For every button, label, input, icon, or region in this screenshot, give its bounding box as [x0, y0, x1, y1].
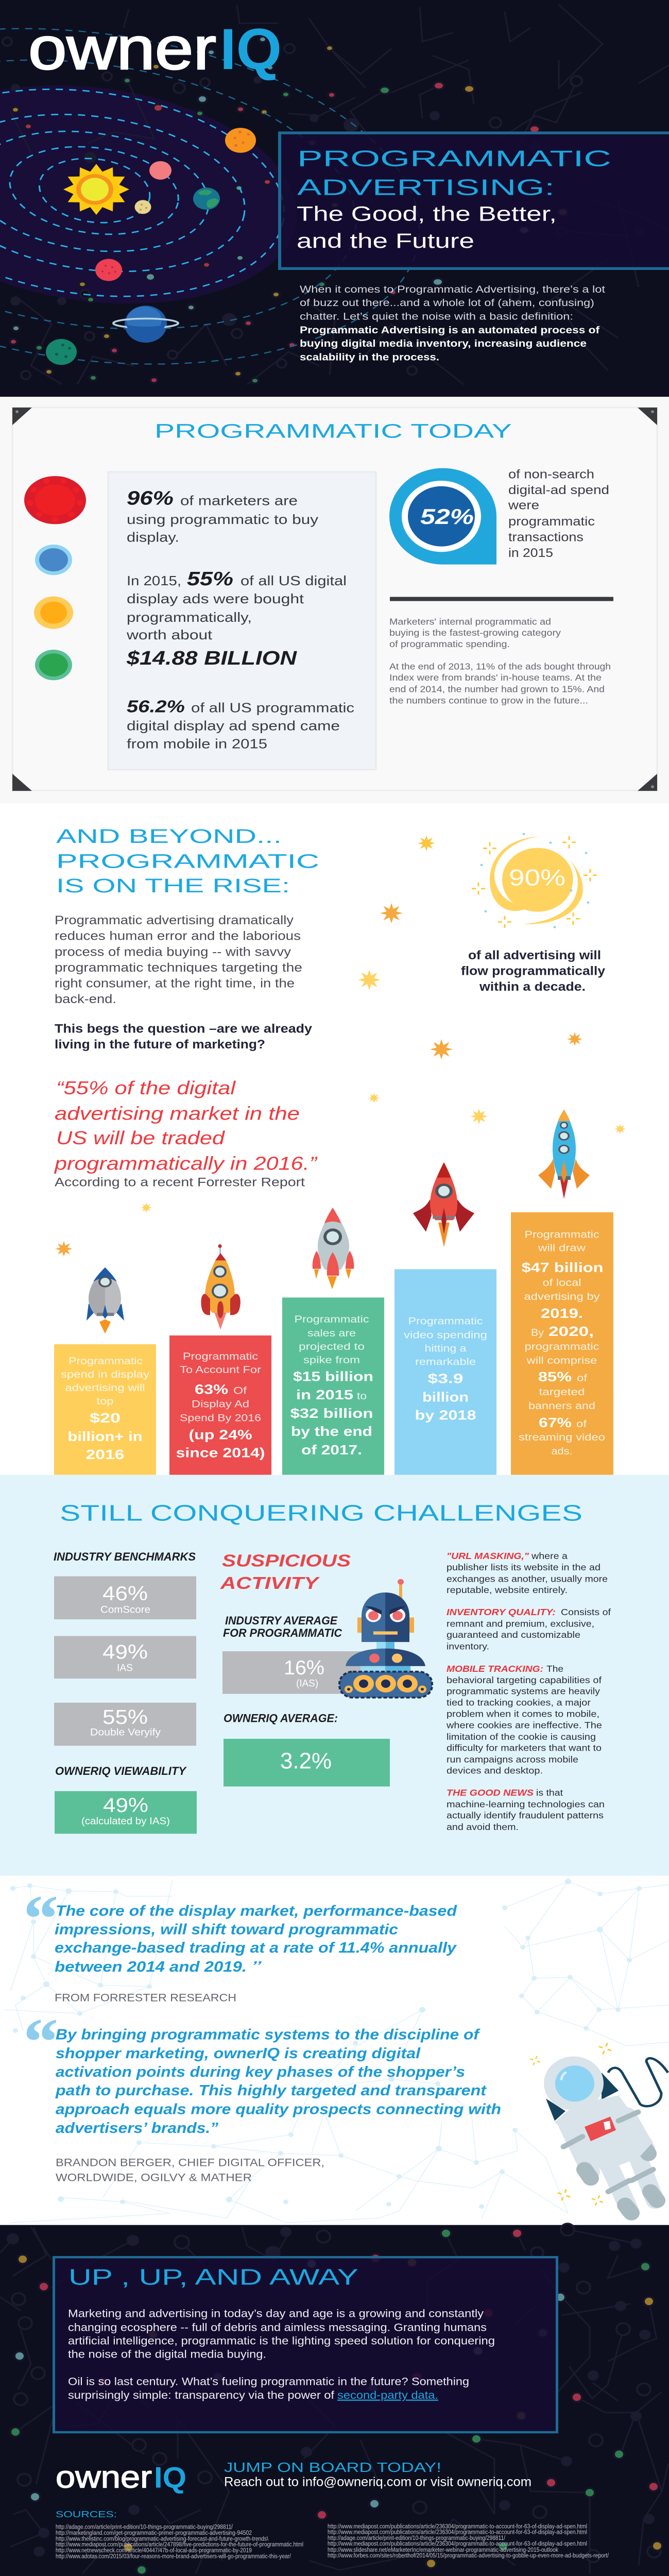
text block: internal buying: end of 2014, the number had grown to 15%. And [389, 685, 605, 694]
stat box: double verify [54, 1703, 196, 1745]
icon: sun [63, 164, 129, 215]
title: programmatic advertising: ADVERTISING: [297, 175, 555, 200]
text block: rise body: Programmatic advertising dramatically [55, 913, 294, 927]
text block: sources left: http://www.thelistinc.com/blog/programmatic-advertising-forecast-and-future-growth-trends\ [56, 2535, 268, 2542]
text block: sources left [56, 2523, 303, 2560]
bar: video spending: $3.9 [427, 1371, 464, 1386]
text block: sources left: http://www.netnewscheck.com/article/40447/47b-of-local-ads-programmatic-by-2019 [56, 2547, 252, 2554]
text block: non-search spend: programmatic [508, 515, 595, 529]
stat: 96 percent: of marketers are [180, 493, 298, 508]
text block: quote attribution: According to a recent Forrester Report [55, 1176, 305, 1189]
bar: programmatic sales: by the end [291, 1424, 372, 1439]
heading: suspicious activity [220, 1551, 351, 1592]
text block: sources left: http://adage.com/article/print-edition/10-things-programmatic-buying/298811/ [56, 2523, 233, 2530]
heading: sources: SOURCES: [56, 2510, 117, 2519]
panel: still conquering challenges [0, 1475, 669, 1876]
stat: 96 percent [127, 488, 318, 545]
text block: marketing paragraph [68, 2307, 495, 2360]
text block: sources right: http://adage.com/article/print-edition/10-things-programmatic-buying/298811/ [328, 2534, 505, 2541]
text block: rise body [55, 913, 302, 1006]
bar: display ad spend [169, 1335, 271, 1475]
text block: 90 percent caption [461, 948, 606, 994]
stat box: industry average [222, 1651, 367, 1694]
rocket: blue with orange fins [538, 1110, 590, 1199]
text block: non-search spend: were [508, 499, 539, 512]
stat: 96 percent: 96% [127, 488, 174, 509]
bar: local and streaming: Programmatic [525, 1229, 599, 1240]
text block: sources right [328, 2523, 609, 2559]
quote: forrester: between 2014 and 2019. [55, 1959, 247, 1975]
bar: local and streaming: By [531, 1327, 544, 1338]
text block: mobile tracking: programmatic systems are heavily [447, 1687, 601, 1697]
stat box: industry average: (IAS) [296, 1677, 318, 1689]
bar: video spending: by 2018 [415, 1408, 476, 1422]
text block: mobile tracking: MOBILE TRACKING: [447, 1664, 543, 1674]
bar: display ad spend: Programmatic [183, 1351, 258, 1362]
bar: programmatic sales: spike from [303, 1354, 360, 1366]
quote: ogilvy: shopper marketing, ownerIQ is creating digital [56, 2045, 421, 2062]
text block: 90 percent caption: flow programmatically [461, 964, 606, 978]
text block: sources left: http://www.adotas.com/2015/03/four-reasons-more-brand-advertisers-will-go-programmatic-this-year/ [56, 2553, 291, 2560]
attribution: ogilvy [56, 2156, 324, 2183]
rocket: orange [201, 1244, 241, 1329]
bar: local and streaming: targeted [539, 1386, 585, 1398]
bar: video spending [394, 1269, 496, 1475]
logo: ownerIQ header: owner [28, 15, 216, 82]
text block: mobile tracking: limitation of the cookie is causing [447, 1732, 596, 1742]
stat: 56.2 percent: 56.2% [127, 697, 185, 716]
text block: header intro: scalability in the process. [300, 351, 439, 363]
bar: programmatic sales: in 2015 [296, 1387, 353, 1402]
bar: display ad spend: To Account For [180, 1364, 261, 1376]
panel: programmatic today [0, 397, 669, 803]
quote: ogilvy: activation points during key phases of the shopper’s [56, 2064, 465, 2080]
title: programmatic advertising [297, 146, 611, 200]
text block: sources right: http://www.mediapost.com/publications/article/236304/programmatic-to-account-for-63-of-display-ad-spen.html [328, 2540, 587, 2547]
icon: orange planet [225, 128, 256, 153]
stat box: industry average: 16% [284, 1656, 324, 1679]
subheading: industry average [223, 1614, 342, 1640]
bar: local and streaming: of [576, 1418, 587, 1430]
text block: non-search spend: of non-search [508, 468, 594, 481]
text block: sources right: http://www.mediapost.com/publications/article/236304/programmatic-to-account-for-63-of-display-ad-spen.html [328, 2529, 587, 2536]
subheading: industry average: FOR PROGRAMMATIC [223, 1626, 342, 1640]
attribution: forrester: FROM FORRESTER RESEARCH [55, 1991, 236, 2004]
text block: header intro: When it comes to Programmatic Advertising, there’s a lot [300, 284, 605, 295]
bar: 2016 display [54, 1344, 156, 1475]
stat: 55 percent: worth about [126, 628, 212, 642]
heading: and beyond: AND BEYOND... [56, 826, 282, 847]
text block: internal buying: of programmatic spending. [389, 639, 510, 650]
panel: key statistics [108, 472, 376, 770]
stat box: ownerIQ viewability: (calculated by IAS) [81, 1816, 170, 1827]
bar: programmatic sales [282, 1297, 384, 1475]
subtitle [297, 202, 557, 252]
text block: header intro: buying digital media inventory, increasing audience [300, 338, 587, 349]
bar: video spending: remarkable [415, 1357, 476, 1367]
text block: mobile tracking: The [546, 1664, 563, 1674]
panel: and beyond [0, 803, 669, 1475]
stat: 96 percent: display. [127, 530, 179, 545]
text block: oil paragraph: second-party data. [337, 2388, 438, 2401]
text block: rise body: programmatic techniques targeting the [55, 961, 302, 975]
bar: video spending: Programmatic [408, 1316, 483, 1327]
text block: internal buying: Marketers' internal programmatic ad [389, 617, 551, 627]
quote: ogilvy: path to purchase. This highly targeted and transparent [55, 2082, 487, 2099]
text block: question: This begs the question –are we already [55, 1022, 313, 1036]
bar: 2016 display: 2016 [85, 1447, 125, 1462]
text block: 90 percent caption: within a decade. [479, 980, 586, 994]
text block: oil paragraph: surprisingly simple: transparency via the power of [68, 2388, 335, 2401]
text block: marketing paragraph: changing ecosphere -- full of debris and aimless messaging. Granting humans [68, 2321, 487, 2333]
text block: non-search spend: in 2015 [508, 546, 553, 560]
text block: marketing paragraph: artificial intelligence, programmatic is the lighting speed solution for conquering [68, 2334, 495, 2347]
quote: ogilvy: advertisers’ brands.” [56, 2120, 219, 2136]
stat box: double verify: Double Veryify [90, 1727, 161, 1738]
stat: 56.2 percent: of all US programmatic [191, 700, 354, 715]
icon: quote mark one: “ [20, 1881, 57, 1956]
text block: internal buying [389, 617, 611, 706]
heading: still conquering challenges: STILL CONQUERING CHALLENGES [60, 1501, 582, 1526]
stat: 55 percent: programmatically, [127, 609, 252, 625]
bar: 2016 display: billion+ in [68, 1429, 143, 1444]
text block: the good news: machine-learning technologies can [447, 1800, 605, 1810]
subtitle: The Good, the Better, [297, 202, 557, 225]
text block: url masking: where a [531, 1551, 568, 1562]
bar: 2016 display: $20 [90, 1410, 121, 1426]
text block: url masking: publisher lists its website in the ad [447, 1563, 601, 1573]
bar: display ad spend: Display Ad [192, 1398, 249, 1410]
text block: internal buying: the numbers continue to grow in the future... [389, 696, 588, 706]
text block: url masking [447, 1551, 608, 1596]
attribution: ogilvy: WORLDWIDE, OGILVY & MATHER [56, 2171, 252, 2183]
heading: and beyond: IS ON THE RISE: [56, 875, 290, 896]
subtitle: and the Future [297, 229, 474, 252]
stat box: double verify: 55% [102, 1706, 148, 1728]
bar: display ad spend: Spend By 2016 [180, 1412, 261, 1423]
quote: 55 percent: programmatically in 2016.” [54, 1154, 318, 1174]
text block: the good news: actually identify fraudulent patterns [447, 1810, 604, 1821]
bar: local and streaming: will draw [538, 1243, 586, 1253]
bar: programmatic sales: to [357, 1391, 367, 1402]
bar: local and streaming: of local [543, 1277, 581, 1289]
stat box: ias: IAS [117, 1663, 133, 1673]
stat box: ownerIQ viewability [55, 1791, 197, 1834]
stat: 55 percent: 55% [187, 568, 233, 590]
text block: marketing paragraph: Marketing and advertising in today’s day and age is a growing and constantly [68, 2307, 484, 2319]
text block: header intro: Programmatic Advertising is an automated process of [300, 325, 599, 336]
icon: green planet [46, 339, 77, 365]
bar: programmatic sales: projected to [299, 1341, 365, 1352]
text block: sources left: http://www.mediapost.com/publications/article/247898/five-predictions-for-the-future-of-programmatic.html [56, 2541, 303, 2548]
quote: ogilvy: By bringing programmatic systems to the discipline of [56, 2026, 481, 2043]
stat box: ownerIQ average [224, 1739, 390, 1787]
panel: header space background [0, 0, 669, 397]
bar: 2016 display: advertising will [65, 1382, 145, 1394]
icon: green circle [35, 650, 72, 680]
text block: url masking: reputable, website entirely. [447, 1585, 568, 1596]
heading: programmatic today: PROGRAMMATIC TODAY [155, 420, 512, 442]
bar: programmatic sales: $32 billion [290, 1405, 373, 1421]
text block: oil paragraph [68, 2375, 469, 2401]
panel: up up and away footer background [0, 2224, 669, 2576]
attribution: ogilvy: BRANDON BERGER, CHIEF DIGITAL OFFICER, [56, 2156, 324, 2168]
bar: local and streaming: $47 billion [521, 1260, 603, 1275]
bar: local and streaming: 85% [538, 1369, 572, 1384]
diagram: dashed orbit rings [0, 0, 447, 404]
stat: 56.2 percent: digital display ad spend came [127, 718, 340, 733]
text block: mobile tracking: tied to tracking cookies, a major [447, 1698, 591, 1708]
icon: astronaut [528, 2041, 668, 2213]
quote: forrester: impressions, will shift toward programmatic [55, 1921, 398, 1938]
title: programmatic advertising: PROGRAMMATIC [297, 146, 611, 171]
heading: jump on board: JUMP ON BOARD TODAY! [224, 2460, 441, 2475]
quote: 55 percent [54, 1078, 318, 1174]
stat: 96 percent: using programmatic to buy [127, 512, 318, 527]
icon: ringed planet [113, 306, 178, 343]
logo: ownerIQ footer: owner [56, 2460, 152, 2495]
bar: local and streaming: 67% [539, 1415, 572, 1430]
heading: suspicious activity: ACTIVITY [220, 1573, 320, 1592]
bar: local and streaming: will comprise [526, 1355, 597, 1366]
quote: forrester: ” [251, 1959, 262, 1975]
panel: quotes [0, 1876, 669, 2225]
text block: mobile tracking: where cookies are ineffective. The [446, 1720, 602, 1731]
chart: 90 percent icon: 90% [509, 865, 565, 891]
text block: mobile tracking: devices and desktop. [447, 1766, 543, 1776]
panel: title box [280, 133, 669, 268]
text block: rise body: process of media buying -- with savvy [55, 945, 291, 959]
text block: question [55, 1022, 313, 1052]
bar: local and streaming: 2020, [548, 1324, 594, 1339]
bar: local and streaming: 2019. [541, 1306, 583, 1321]
text block: internal buying: buying is the fastest-growing category [389, 628, 561, 638]
bar: programmatic sales: $15 billion [293, 1369, 373, 1384]
bar: local and streaming: ads. [551, 1446, 573, 1457]
text block: inventory quality: guaranteed and customizable [447, 1630, 580, 1640]
stat box: ownerIQ average: 3.2% [280, 1749, 332, 1773]
text block: sources right: http://www.slideshare.net/eMarketerInc/emarketer-webinar-programmatic-advertising-2015-outlook [328, 2546, 559, 2553]
stat: 55 percent: $14.88 BILLION [126, 648, 297, 669]
stat box: ias: 49% [102, 1641, 148, 1663]
text block: mobile tracking [446, 1664, 602, 1776]
text block: non-search spend: transactions [508, 531, 584, 544]
text block: oil paragraph: Oil is so last century. What’s fueling programmatic in the future? Something [68, 2375, 469, 2387]
stat box: comscore [54, 1577, 196, 1619]
icon: red circle [24, 476, 86, 524]
text block: mobile tracking: problem when it comes to mobile, [447, 1709, 599, 1719]
text block: the good news: is that [536, 1788, 563, 1798]
icon: cream moon [135, 200, 151, 214]
text block: non-search spend [508, 468, 609, 560]
text block: url masking: "URL MASKING," [447, 1551, 529, 1562]
text block: header intro: chatter. Let’s quiet the noise with a basic definition: [300, 311, 573, 322]
subheading: industry benchmarks: INDUSTRY BENCHMARKS [54, 1550, 196, 1564]
text block: sources left: http://marketingland.com/get-programmatic-primer-programmatic-advertising-94502 [56, 2530, 252, 2536]
quote: forrester: exchange-based trading at a rate of 11.4% annually [55, 1940, 457, 1956]
icon: earth planet [193, 188, 220, 210]
bar: video spending: video spending [404, 1330, 487, 1341]
chart: 52 percent badge: 52% [420, 505, 474, 529]
stat: 55 percent: display ads were bought [127, 591, 304, 606]
bar: 2016 display: spend in display [61, 1369, 150, 1380]
heading: and beyond: PROGRAMMATIC [56, 851, 319, 872]
heading: and beyond [56, 826, 319, 896]
text block: rise body: reduces human error and the laborious [55, 929, 301, 943]
text block: the good news [447, 1788, 605, 1833]
quote: 55 percent: advertising market in the [55, 1104, 300, 1124]
bar: local and streaming: advertising by [524, 1291, 600, 1302]
quote: forrester [55, 1903, 458, 1975]
panel: up up and away box [54, 2257, 557, 2432]
bar: display ad spend: 63% [195, 1382, 228, 1397]
icon: amber circle [34, 597, 73, 629]
text block: sources right: http://www.mediapost.com/publications/article/236304/programmatic-to-account-for-63-of-display-ad-spen.html [328, 2523, 587, 2530]
stat: 56.2 percent [127, 697, 354, 751]
bar: display ad spend: since 2014) [176, 1445, 265, 1460]
text block: header intro [300, 284, 605, 363]
rocket: red [413, 1162, 474, 1247]
bar: local and streaming: streaming video [519, 1432, 605, 1443]
heading: suspicious activity: SUSPICIOUS [222, 1551, 351, 1570]
text block: inventory quality: INVENTORY QUALITY: [447, 1607, 556, 1618]
quote: 55 percent: “55% of the digital [56, 1078, 236, 1098]
quote: 55 percent: US will be traded [56, 1128, 226, 1148]
text block: inventory quality: inventory. [447, 1641, 489, 1652]
text block: rise body: right consumer, at the right time, in the [55, 977, 295, 990]
icon: pink planet [149, 161, 171, 180]
text block: header intro: of buzz out there...and a whole lot of (ahem, confusing) [300, 297, 594, 309]
bar: local and streaming: of [577, 1372, 587, 1384]
bar: video spending: hitting a [425, 1343, 467, 1354]
text block: the good news: THE GOOD NEWS [447, 1788, 534, 1798]
subheading: ownerIQ viewability: OWNERIQ VIEWABILITY [55, 1765, 187, 1778]
quote: forrester: The core of the display market, performance-based [56, 1903, 458, 1919]
stat box: comscore: ComScore [100, 1604, 150, 1615]
text block: non-search spend: digital-ad spend [508, 483, 609, 497]
chart: 90 percent icon [472, 833, 597, 928]
icon: red planet [95, 259, 122, 281]
text block: rise body: back-end. [55, 992, 116, 1006]
stat: 56.2 percent: from mobile in 2015 [127, 736, 267, 751]
logo: ownerIQ footer: IQ [154, 2461, 186, 2494]
text block: internal buying: Index were from brands' in-house teams. At the [389, 673, 602, 683]
rocket: blue [87, 1267, 124, 1334]
stat box: ownerIQ viewability: 49% [103, 1794, 148, 1816]
text block: question: living in the future of marketing? [55, 1038, 265, 1052]
bar: programmatic sales: of 2017. [301, 1442, 362, 1458]
quote: ogilvy [55, 2026, 501, 2136]
bar: programmatic sales: sales are [307, 1328, 356, 1339]
icon: robot [339, 1579, 432, 1698]
text block: contact: Reach out to info@owneriq.com or visit owneriq.com [224, 2475, 531, 2489]
chart: 52 percent badge [389, 468, 496, 565]
bar: local and streaming: programmatic [525, 1341, 599, 1352]
text block: mobile tracking: behavioral targeting capabilities of [447, 1675, 602, 1686]
quote: ogilvy: approach equals more quality prospects connecting with [56, 2101, 501, 2117]
text block: url masking: exchanges as another, usually more [447, 1574, 608, 1584]
text block: mobile tracking: difficulty for marketers that want to [447, 1743, 602, 1753]
logo: ownerIQ header: IQ [220, 17, 282, 81]
icon: quote mark two: “ [20, 2005, 57, 2079]
bar: 2016 display: Programmatic [68, 1355, 143, 1367]
text block: internal buying: At the end of 2013, 11% of the ads bought through [389, 662, 611, 672]
stat box: comscore: 46% [102, 1582, 148, 1605]
bar: local and streaming: banners and [528, 1400, 595, 1412]
subheading: ownerIQ average: OWNERIQ AVERAGE: [224, 1712, 338, 1725]
stat: 55 percent: of all US digital [241, 573, 347, 588]
stat box: ias [54, 1636, 196, 1679]
text block: inventory quality: remnant and premium, exclusive, [447, 1619, 594, 1629]
text block: inventory quality: Consists of [561, 1607, 611, 1618]
text block: the good news: and avoid them. [447, 1822, 519, 1833]
heading: up up and away: UP , UP, AND AWAY [68, 2265, 358, 2290]
bar: programmatic sales: Programmatic [295, 1314, 369, 1325]
text block: mobile tracking: run campaigns across mobile [447, 1755, 578, 1765]
text block: 90 percent caption: of all advertising will [468, 948, 601, 962]
bar: video spending: billion [422, 1389, 469, 1404]
text block: marketing paragraph: the noise of the digital media buying. [68, 2348, 266, 2360]
stat: 55 percent [126, 568, 347, 669]
rocket: grey [313, 1208, 354, 1289]
icon: blue circle [35, 545, 72, 575]
bar: display ad spend: (up 24% [188, 1427, 252, 1442]
bar: local and streaming [511, 1212, 613, 1475]
decoration: stars [55, 835, 626, 1257]
text block: inventory quality [447, 1607, 611, 1652]
bar: 2016 display: top [97, 1396, 113, 1407]
bar: display ad spend: Of [233, 1385, 247, 1396]
stat: 55 percent: In 2015, [127, 573, 181, 588]
subheading: industry average: INDUSTRY AVERAGE [225, 1614, 338, 1628]
